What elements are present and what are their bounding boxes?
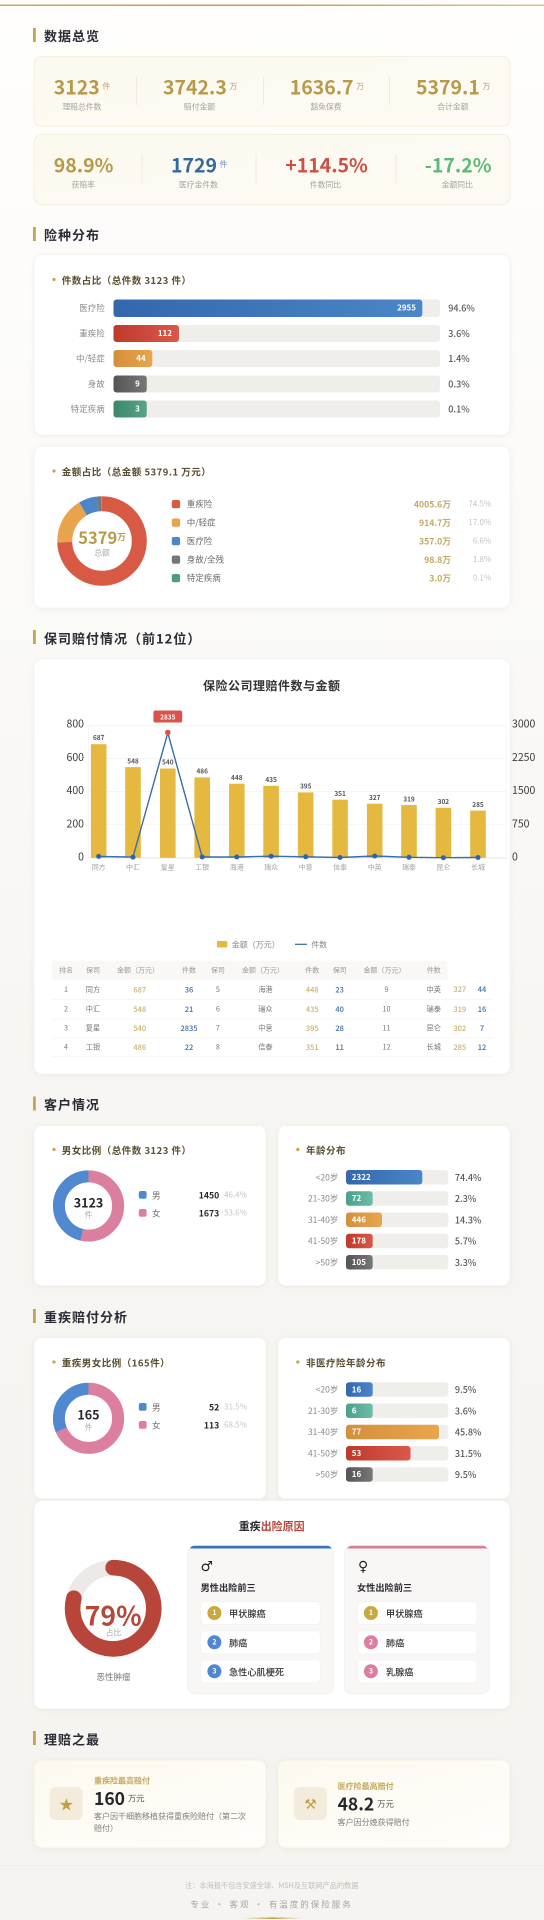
table: 保司排名: 44 <box>478 984 487 995</box>
table: 保司排名: 保司 <box>333 966 347 976</box>
donut center: 165 <box>77 1404 100 1424</box>
bar chart: 年龄: >50岁 <box>316 1256 338 1268</box>
table: 保司排名: 瑞泰 <box>427 1004 441 1014</box>
table: 保司排名: 7 <box>480 1023 484 1034</box>
footer <box>0 1865 544 1920</box>
panel: 重疾险最高赔付: 客户因干细胞移植获得重疾险赔付（第二次 <box>94 1811 246 1822</box>
combo chart: 金额柱状与件数折线: 395 <box>300 781 312 791</box>
legend <box>139 1400 248 1432</box>
legend: 男 <box>152 1190 161 1202</box>
bar chart: 险种件数: 0.3% <box>448 378 470 390</box>
combo chart: 金额柱状与件数折线: 285 <box>472 799 484 809</box>
table: 保司排名: 瑞众 <box>258 1004 273 1014</box>
bar chart: 险种件数: 1.4% <box>448 352 470 365</box>
legend: 1673 <box>199 1206 219 1220</box>
table: 保司排名: 12 <box>383 1043 390 1053</box>
table: 保司排名: 中意 <box>258 1024 273 1034</box>
table: 保司排名: 6 <box>216 1004 220 1014</box>
bar chart: 非医疗险年龄: 31.5% <box>455 1447 482 1460</box>
panel: 保司图表与表格 <box>34 659 535 1074</box>
stat: 获赔率: 98.9% <box>54 150 114 178</box>
legend: 98.8万 <box>424 553 451 566</box>
stat: 医疗金件数: 医疗金件数 <box>179 180 218 190</box>
section heading: 理赔之最: 理赔之最 <box>44 1730 100 1748</box>
table: 保司排名: 21 <box>185 1004 193 1015</box>
bar chart: 非医疗险年龄: 9.5% <box>455 1383 477 1396</box>
combo chart: 金额柱状与件数折线: 435 <box>265 774 277 784</box>
combo chart: 金额柱状与件数折线: 351 <box>334 788 346 798</box>
legend: 0.1% <box>473 572 492 584</box>
section heading: 保司赔付情况: 保司赔付情况（前12位） <box>44 628 201 648</box>
list item 3: 3 <box>212 1666 216 1676</box>
table: 保司排名: 319 <box>453 1004 466 1015</box>
legend: 3.0万 <box>429 572 451 584</box>
table: 保司排名: 海港 <box>258 985 273 995</box>
list item 2 <box>358 1631 477 1654</box>
combo chart: 金额柱状与件数折线: 中汇 <box>126 862 140 872</box>
table: 保司排名: 435 <box>306 1004 319 1015</box>
combo chart: 金额柱状与件数折线: 瑞众 <box>264 862 278 872</box>
list item 2: 2 <box>212 1637 216 1647</box>
donut center: 5379万 <box>78 525 126 549</box>
callout: 2835 <box>153 710 182 722</box>
list item 1 <box>358 1602 477 1624</box>
table: 保司排名 <box>52 961 493 1057</box>
table: 保司排名: 中汇 <box>86 1004 100 1014</box>
stat: 合计金额: 合计金额 <box>437 102 469 112</box>
stat: 豁免保费: 豁免保费 <box>310 102 342 112</box>
chart legend <box>217 940 327 950</box>
bar chart: 年龄: 31-40岁 <box>308 1214 338 1226</box>
combo chart: 金额柱状与件数折线: 1500 <box>512 783 535 798</box>
list item 3: 急性心肌梗死 <box>229 1664 284 1678</box>
top gold line <box>0 4 544 6</box>
combo chart: 金额柱状与件数折线: 中意 <box>299 862 313 872</box>
panel: 男性出险前三 <box>188 1546 333 1694</box>
table: 保司排名: 22 <box>185 1042 193 1053</box>
table: 保司排名: 486 <box>133 1042 146 1053</box>
panel: 重疾险最高赔付: 赔付） <box>94 1823 118 1834</box>
bar chart: 非医疗险年龄 <box>308 1382 482 1482</box>
combo chart: 金额柱状与件数折线: 302 <box>438 796 449 806</box>
bar chart: 年龄: 21-30岁 <box>308 1193 338 1205</box>
table: 保司排名: 7 <box>216 1024 220 1034</box>
list item 3 <box>201 1660 320 1683</box>
table: 保司排名: 3 <box>64 1024 68 1034</box>
table: 保司排名: 同方 <box>86 985 100 995</box>
chart title: 保险公司理赔件数与金额 <box>203 677 340 694</box>
combo chart: 金额柱状与件数折线: 548 <box>127 755 139 765</box>
legend: 特定疾病 <box>187 572 221 584</box>
bar chart: 险种件数: 112 <box>158 328 172 339</box>
subheading: 非医疗险年龄分布 <box>306 1355 386 1369</box>
bar chart: 险种件数: 3 <box>135 404 140 414</box>
stat: 赔付金额: 3742.3 万 <box>163 72 237 100</box>
donut chart: 重疾性别 <box>59 1389 118 1448</box>
table: 保司排名: 11 <box>335 1042 344 1053</box>
icon: star: ★ <box>59 1796 74 1816</box>
bar chart: 险种件数: 94.6% <box>448 302 475 314</box>
legend: 重疾险 <box>187 498 213 510</box>
combo chart: 金额柱状与件数折线: 同方 <box>92 862 106 872</box>
legend: 68.5% <box>224 1420 248 1430</box>
bar chart: 非医疗险年龄: 45.8% <box>455 1426 482 1438</box>
panel: 医疗险最高赔付 <box>278 1760 510 1848</box>
subheading: 金额占比（总金额 5379.1 万元） <box>62 464 211 478</box>
panel: 女性出险前三: 女性出险前三 <box>357 1580 412 1594</box>
combo chart: 金额柱状与件数折线: 0 <box>512 850 518 864</box>
table: 保司排名: 长城 <box>427 1043 441 1053</box>
panel: overview row 2 <box>34 134 510 204</box>
footer slogan: 专业 · 客观 · 有温度的保险服务 <box>190 1898 353 1910</box>
table: 保司排名: 1 <box>64 985 68 995</box>
list item 1: 1 <box>369 1608 373 1618</box>
table: 保司排名: 40 <box>335 1004 344 1015</box>
table: 保司排名: 302 <box>453 1023 466 1034</box>
combo chart: 金额柱状与件数折线: 486 <box>196 766 208 776</box>
legend: 31.5% <box>224 1402 248 1412</box>
panel: 重疾险最高赔付: 160 万元 <box>94 1786 145 1811</box>
bar chart: 非医疗险年龄: 3.6% <box>455 1404 477 1418</box>
ring chart: 恶性肿瘤 79%: 恶性肿瘤 <box>96 1671 131 1683</box>
combo chart: 金额柱状与件数折线: 3000 <box>512 716 535 732</box>
combo chart: 金额柱状与件数折线: 448 <box>231 772 243 782</box>
list item 1 <box>201 1602 320 1624</box>
donut chart: 性别 <box>59 1176 118 1236</box>
donut center: 总额 <box>94 548 110 558</box>
combo chart: 金额柱状与件数折线: 540 <box>162 757 174 767</box>
stat: 金额同比: -17.2% <box>425 150 492 178</box>
icon: male: ♂ <box>200 1559 213 1575</box>
table: 保司排名: 327 <box>453 984 466 995</box>
stat: 理赔总件数: 理赔总件数 <box>63 102 102 112</box>
donut center <box>77 1404 100 1433</box>
legend: 113 <box>204 1418 219 1432</box>
combo chart: 金额柱状与件数折线: 2250 <box>512 750 535 765</box>
subheading: 男女比例（总件数 3123 件） <box>62 1143 192 1157</box>
bar chart: 年龄: 2322 <box>352 1172 371 1183</box>
panel: 非医疗险年龄分布 <box>278 1338 510 1499</box>
stat: 赔付金额: 赔付金额 <box>184 102 215 112</box>
combo chart: 金额柱状与件数折线: 319 <box>403 793 415 803</box>
stat: 合计金额: 5379.1 万 <box>416 72 490 100</box>
bar chart: 非医疗险年龄: <20岁 <box>316 1384 338 1396</box>
ring chart: 恶性肿瘤 79%: 占比 <box>106 1628 121 1638</box>
panel: 男女比例 <box>34 1126 266 1286</box>
bar chart: 年龄: 105 <box>352 1257 366 1268</box>
table: 保司排名: 687 <box>133 984 146 996</box>
legend: 1450 <box>199 1188 219 1202</box>
donut center: 件 <box>85 1422 93 1433</box>
table: 保司排名: 10 <box>383 1004 390 1014</box>
panel: 医疗险最高赔付: 客户因分娩获得赔付 <box>338 1817 410 1828</box>
combo chart: 金额柱状与件数折线: 中英 <box>368 862 382 872</box>
bar chart: 非医疗险年龄: 53 <box>352 1448 362 1459</box>
stat: 金额同比: 金额同比 <box>442 180 473 190</box>
table: 保司排名: 2835 <box>180 1023 198 1034</box>
table: 保司排名: 件数 <box>427 966 441 976</box>
stat: 医疗金件数: 1729 件 <box>171 150 228 178</box>
list item 1: 1 <box>212 1608 216 1618</box>
subheading: 重疾男女比例（165件） <box>62 1355 170 1369</box>
combo chart: 金额柱状与件数折线: 昆仑 <box>436 862 450 872</box>
combo chart: 金额柱状与件数折线: 海港 <box>230 862 244 872</box>
table: 保司排名: 金额（万元） <box>242 966 284 976</box>
bar chart: 险种件数: 2955 <box>397 302 416 314</box>
legend: 中/轻症 <box>187 516 216 528</box>
panel: 年龄分布 <box>278 1126 510 1286</box>
bar chart: 年龄: 178 <box>352 1236 366 1246</box>
table: 保司排名: 23 <box>335 984 344 996</box>
legend: 52 <box>209 1400 219 1414</box>
bar chart: 险种件数: 3.6% <box>448 327 470 340</box>
bar chart: 非医疗险年龄: 9.5% <box>455 1468 477 1481</box>
table: 保司排名: 16 <box>478 1004 486 1015</box>
bar chart: 年龄: 3.3% <box>455 1256 477 1269</box>
table: 保司排名: 昆仑 <box>427 1024 441 1034</box>
table: 保司排名: 2 <box>64 1004 68 1014</box>
panel: 件数占比 <box>34 254 510 435</box>
legend: 17.0% <box>468 517 492 528</box>
bar chart: 年龄: 41-50岁 <box>308 1235 338 1247</box>
bar chart: 非医疗险年龄: 16 <box>352 1384 362 1395</box>
section heading: 数据总览: 数据总览 <box>44 26 100 45</box>
bar chart: 非医疗险年龄: 16 <box>352 1469 362 1480</box>
chart legend: 金额（万元） <box>232 940 280 950</box>
combo chart: 金额柱状与件数折线: 327 <box>369 792 381 802</box>
legend: 914.7万 <box>419 516 451 529</box>
table: 保司排名: 件数 <box>305 966 319 976</box>
icon: hammers: ⚒ <box>304 1797 317 1813</box>
table: 保司排名: 9 <box>384 985 388 995</box>
icon: star <box>50 1787 83 1820</box>
ring chart: 恶性肿瘤 79% <box>73 1568 154 1683</box>
stat: 件数同比: 件数同比 <box>310 180 341 190</box>
subheading: 件数占比（总件数 3123 件） <box>62 273 192 287</box>
legend: 53.6% <box>224 1208 248 1218</box>
section heading: 客户情况: 客户情况 <box>44 1094 100 1114</box>
table: 保司排名: 金额（万元） <box>117 966 159 976</box>
table: 保司排名: 12 <box>478 1042 486 1053</box>
table: 保司排名: 保司 <box>211 966 225 976</box>
table: 保司排名: 4 <box>64 1043 68 1053</box>
bar chart: 年龄: 2.3% <box>455 1192 477 1205</box>
bar chart: 年龄: 74.4% <box>455 1171 482 1184</box>
bar chart: 年龄: <20岁 <box>316 1171 338 1183</box>
ring chart: 恶性肿瘤 79%: 79% <box>85 1594 142 1634</box>
bar chart: 非医疗险年龄: >50岁 <box>316 1469 338 1481</box>
list item 3: 3 <box>369 1666 373 1676</box>
bar chart: 险种件数 <box>71 300 475 418</box>
icon: female: ♀ <box>358 1559 368 1575</box>
panel: 医疗险最高赔付: 48.2 万元 <box>338 1792 394 1816</box>
combo chart: 金额柱状与件数折线: 复星 <box>161 862 175 872</box>
table: 保司排名: 28 <box>335 1023 344 1034</box>
combo chart: 金额柱状与件数折线: 750 <box>512 816 530 832</box>
stat: 豁免保费: 1636.7 万 <box>290 72 364 100</box>
table: 保司排名: 5 <box>216 985 220 995</box>
bar chart: 年龄: 14.3% <box>455 1214 482 1226</box>
bar chart: 险种件数: 重疾险 <box>79 328 105 340</box>
table: 保司排名: 信泰 <box>258 1043 273 1053</box>
panel: 重疾险最高赔付: 重疾险最高赔付 <box>94 1776 150 1786</box>
bar chart: 险种件数: 44 <box>136 353 146 364</box>
legend: 1.8% <box>473 554 492 565</box>
combo chart: 金额柱状与件数折线: 400 <box>67 783 84 798</box>
combo chart: 金额柱状与件数折线: 200 <box>67 816 84 832</box>
bar chart: 非医疗险年龄: 77 <box>352 1427 362 1438</box>
combo chart: 金额柱状与件数折线: 长城 <box>471 862 485 872</box>
table: 保司排名: 工银 <box>86 1043 100 1053</box>
donut chart: 金额 <box>65 504 139 578</box>
bar chart: 险种件数: 0.1% <box>448 402 470 416</box>
combo chart: 金额柱状与件数折线 <box>67 710 535 872</box>
chart legend: 件数 <box>311 940 327 950</box>
panel: 女性出险前三 <box>345 1546 489 1694</box>
table: 保司排名: 排名 <box>59 966 73 976</box>
table: 保司排名: 36 <box>185 984 193 996</box>
bar chart: 非医疗险年龄: 6 <box>352 1406 357 1416</box>
callout: 2835: 2835 <box>160 712 176 722</box>
list item 1: 甲状腺癌 <box>386 1606 423 1620</box>
table: 保司排名: 件数 <box>182 966 196 976</box>
table: 保司排名: 548 <box>133 1004 146 1015</box>
table: 保司排名: 395 <box>306 1023 319 1034</box>
stat: 理赔总件数: 3123 件 <box>54 72 110 100</box>
legend: 身故/全残 <box>187 554 225 566</box>
list item 2: 肺癌 <box>386 1635 404 1649</box>
legend <box>139 1188 248 1220</box>
bar chart: 年龄: 5.7% <box>455 1234 477 1248</box>
combo chart: 金额柱状与件数折线: 687 <box>93 732 105 742</box>
legend: 男 <box>152 1402 161 1414</box>
table: 保司排名: 285 <box>453 1042 466 1053</box>
panel: 医疗险最高赔付: 医疗险最高赔付 <box>338 1781 394 1792</box>
combo chart: 金额柱状与件数折线: 信泰 <box>333 862 347 872</box>
legend: 46.4% <box>224 1190 248 1200</box>
bar chart: 非医疗险年龄: 41-50岁 <box>308 1447 338 1459</box>
table: 保司排名: 540 <box>133 1023 146 1034</box>
list item 3 <box>358 1660 477 1683</box>
table: 保司排名: 11 <box>383 1024 390 1034</box>
list item 2 <box>201 1631 320 1654</box>
table: 保司排名: 中英 <box>427 985 441 995</box>
list item 2: 2 <box>369 1637 373 1647</box>
legend: 74.5% <box>468 498 492 510</box>
legend: 医疗险 <box>187 535 213 547</box>
legend: 女 <box>152 1208 161 1220</box>
bar chart: 险种件数: 特定疾病 <box>71 403 105 415</box>
bar chart: 险种件数: 身故 <box>88 378 105 390</box>
list item 1: 甲状腺癌 <box>229 1606 266 1620</box>
icon: hammers <box>294 1787 327 1820</box>
table: 保司排名: 351 <box>306 1042 319 1053</box>
bar chart: 非医疗险年龄: 31-40岁 <box>308 1426 338 1438</box>
panel: 重疾险最高赔付 <box>34 1760 266 1848</box>
table: 保司排名: 保司 <box>86 966 100 976</box>
panel: overview row 1 <box>34 56 510 126</box>
table: 保司排名: 8 <box>216 1043 220 1053</box>
stat: 件数同比: +114.5% <box>285 150 368 178</box>
section heading: 险种分布: 险种分布 <box>44 225 100 244</box>
stat: 获赔率: 获赔率 <box>72 180 95 190</box>
combo chart: 金额柱状与件数折线: 600 <box>67 750 84 765</box>
bar chart: 险种件数: 中/轻症 <box>76 352 105 364</box>
legend: 4005.6万 <box>414 498 451 510</box>
donut center: 件 <box>85 1210 93 1220</box>
list item 2: 肺癌 <box>229 1635 247 1649</box>
legend: 6.6% <box>473 536 492 546</box>
list item 3: 乳腺癌 <box>386 1664 413 1678</box>
panel: 重疾出险原因 <box>34 1500 510 1709</box>
footer note: 注：本海报不包含安盛全球、MSH及互联网产品的数据 <box>185 1881 358 1891</box>
panel: 重疾男女比例 <box>34 1338 266 1499</box>
donut center: 3123 <box>74 1192 103 1212</box>
table: 保司排名: 复星 <box>86 1024 100 1034</box>
panel title: 重疾出险原因 <box>239 1518 305 1534</box>
donut center <box>74 1192 103 1220</box>
section heading: 重疾赔付分析: 重疾赔付分析 <box>44 1307 128 1326</box>
table: 保司排名: 金额（万元） <box>364 966 406 976</box>
combo chart: 金额柱状与件数折线: 0 <box>78 850 84 864</box>
bar chart: 非医疗险年龄: 21-30岁 <box>308 1405 338 1417</box>
combo chart: 金额柱状与件数折线: 工银 <box>195 862 209 872</box>
bar chart: 年龄: 446 <box>352 1214 366 1226</box>
bar chart: 险种件数: 9 <box>135 378 140 390</box>
legend <box>172 498 492 584</box>
legend: 女 <box>152 1420 161 1432</box>
panel: 金额占比 <box>34 446 510 608</box>
panel: 男性出险前三: 男性出险前三 <box>201 1580 256 1594</box>
combo chart: 金额柱状与件数折线: 800 <box>67 716 84 732</box>
table: 保司排名: 448 <box>306 984 319 996</box>
subheading: 年龄分布 <box>306 1143 346 1157</box>
bar chart: 年龄 <box>308 1170 482 1270</box>
bar chart: 险种件数: 医疗险 <box>79 302 105 314</box>
bar chart: 年龄: 72 <box>352 1193 362 1204</box>
combo chart: 金额柱状与件数折线: 瑞泰 <box>402 862 416 872</box>
legend: 357.0万 <box>419 534 451 548</box>
